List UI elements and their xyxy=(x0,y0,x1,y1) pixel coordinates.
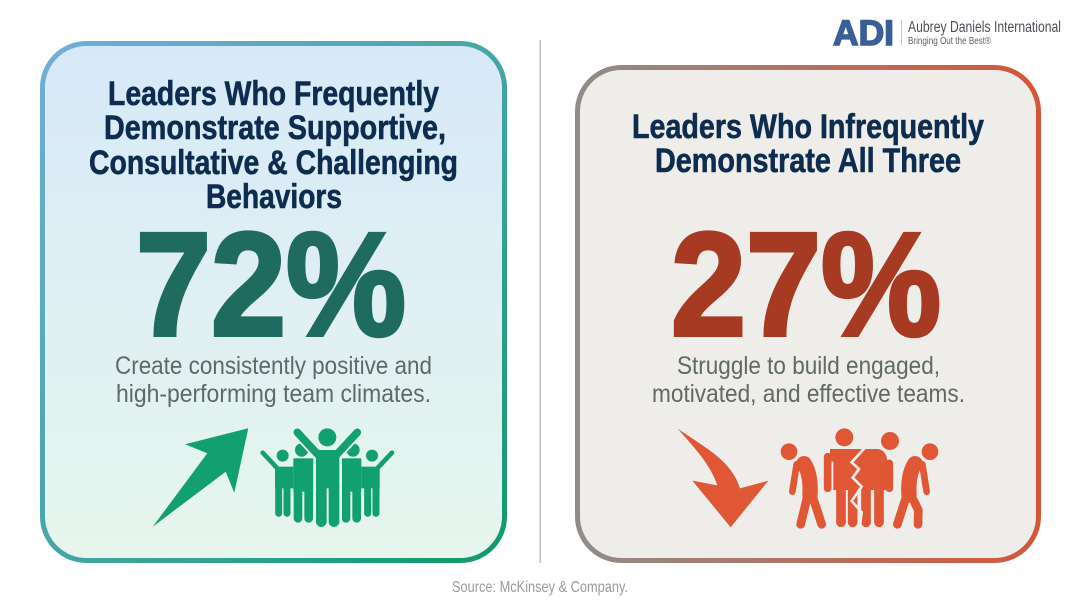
description: positive climates: high-performing team climates. xyxy=(116,380,431,408)
logo mark: ADI: ADI xyxy=(833,14,894,53)
icon: arrow up xyxy=(153,428,248,527)
description: struggling teams: Struggle to build engaged, xyxy=(677,352,940,380)
heading: frequent leaders: Consultative & Challenging xyxy=(89,144,458,182)
heading: frequent leaders: Demonstrate Supportive, xyxy=(104,109,446,147)
statistic: 27%: 27% xyxy=(671,203,941,367)
panel: infrequent leaders xyxy=(578,68,1038,560)
heading: infrequent leaders xyxy=(632,108,984,180)
logo tagline: Bringing Out the Best® xyxy=(908,36,992,47)
heading: frequent leaders xyxy=(89,75,458,216)
heading: frequent leaders: Leaders Who Frequently xyxy=(108,75,439,113)
icon: celebrating team xyxy=(263,428,392,530)
heading: infrequent leaders: Demonstrate All Three xyxy=(655,142,961,180)
panel: frequent leaders xyxy=(42,44,504,560)
heading: infrequent leaders: Leaders Who Infrequently xyxy=(632,108,984,146)
center divider xyxy=(540,40,541,563)
description: positive climates: Create consistently positive and xyxy=(115,352,432,380)
icon: fractured team xyxy=(781,428,938,531)
description: positive climates xyxy=(115,352,432,408)
icon: arrow down xyxy=(677,428,768,527)
statistic: 72%: 72% xyxy=(136,203,406,367)
heading: frequent leaders: Behaviors xyxy=(206,178,342,216)
logo: Aubrey Daniels International xyxy=(833,14,1061,53)
description: struggling teams xyxy=(652,352,965,408)
description: struggling teams: motivated, and effective teams. xyxy=(652,380,965,408)
source note: Source: McKinsey & Company. xyxy=(452,579,628,596)
